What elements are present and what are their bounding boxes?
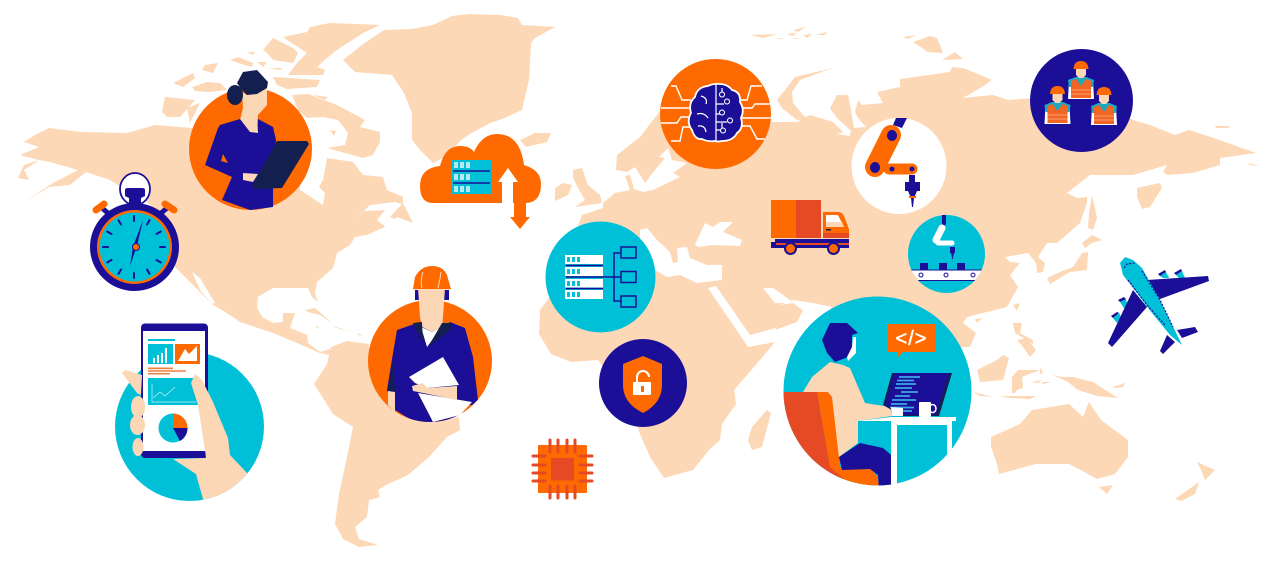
land: New Zealand	[1175, 462, 1215, 501]
belt edges	[905, 270, 989, 280]
land: Iceland	[520, 133, 551, 147]
land: Tasmania	[1099, 485, 1113, 494]
land: Novaya Zemlya	[777, 67, 837, 120]
keyhole	[641, 386, 644, 392]
cab	[823, 212, 849, 238]
land: Hokkaido	[1082, 235, 1102, 248]
left engine two cap	[1111, 312, 1119, 318]
desk leg left	[891, 421, 897, 487]
orange bezel	[97, 210, 172, 284]
sea: Red Sea and Gulf of Aden	[708, 286, 776, 347]
ring handle	[120, 173, 150, 205]
teal disc	[546, 222, 656, 332]
needle	[130, 220, 143, 266]
jacket body	[387, 322, 478, 424]
icon: delivery truck	[771, 200, 849, 254]
bars	[153, 348, 167, 363]
window lines	[1124, 263, 1173, 327]
land: Arctic Russia islands	[750, 27, 1260, 166]
dial ticks	[103, 216, 165, 278]
circuit traces	[661, 86, 771, 141]
right wing engine two	[1176, 271, 1185, 278]
download arrow	[510, 182, 530, 229]
screen	[143, 331, 205, 451]
pie orange slice	[173, 414, 188, 428]
land: North America	[18, 120, 413, 355]
helmet	[1074, 61, 1088, 69]
right engine two cap	[1174, 269, 1182, 275]
server stack	[452, 160, 492, 194]
ring finger	[130, 415, 145, 435]
hair	[415, 288, 449, 300]
navy disc	[1030, 49, 1133, 152]
white disc	[852, 118, 946, 214]
tail left	[1160, 335, 1175, 354]
chassis stripe	[776, 243, 849, 245]
land: Baffin island	[292, 94, 380, 158]
icon: developer at desk	[780, 296, 972, 490]
arm mount	[893, 118, 907, 128]
crown	[125, 188, 145, 205]
collar	[1044, 102, 1070, 112]
vest	[1094, 105, 1114, 124]
land: Kamchatka	[1137, 183, 1162, 209]
conveyor belt	[905, 270, 989, 280]
tail right	[1177, 327, 1198, 338]
cargo box right	[796, 200, 821, 238]
window	[826, 215, 844, 227]
joints	[870, 130, 915, 173]
belt surface	[912, 270, 982, 280]
inland seas	[192, 202, 832, 347]
land: New Guinea	[1053, 375, 1137, 398]
sea: Mediterranean	[640, 228, 722, 283]
right wing	[1147, 276, 1209, 299]
clipboard	[409, 357, 459, 388]
middle finger	[131, 396, 145, 418]
hair	[237, 70, 268, 95]
door handle	[826, 229, 831, 230]
left wing engine one	[1120, 299, 1128, 308]
line chart tile	[148, 378, 199, 405]
mug handle	[929, 404, 936, 412]
left arm	[388, 391, 395, 412]
line chart	[152, 384, 196, 402]
brain midline and circuits	[697, 84, 727, 141]
pie base	[158, 414, 188, 442]
pie navy slice	[173, 428, 188, 441]
icon: shield lock	[599, 339, 687, 427]
left stem	[102, 208, 109, 214]
orange chair edge	[817, 392, 879, 490]
area chart tile	[175, 344, 200, 364]
body	[1091, 103, 1117, 125]
circuit nodes	[720, 92, 733, 133]
worker left	[1044, 86, 1070, 124]
wrist	[909, 175, 915, 182]
forearm	[889, 164, 912, 174]
drill band	[909, 196, 916, 198]
helmet	[1096, 87, 1112, 95]
collar	[1068, 77, 1094, 87]
land: Southeast Asian islands	[973, 303, 1052, 400]
chassis	[771, 239, 849, 248]
land: South America	[314, 341, 460, 547]
connector lines	[566, 253, 621, 301]
white shirt	[422, 328, 439, 347]
hand	[891, 407, 903, 416]
orange disc	[660, 59, 771, 169]
sea: Black Sea	[695, 222, 742, 247]
hair	[822, 323, 858, 362]
clipped scene	[780, 362, 956, 490]
teal disc	[115, 352, 264, 501]
bubble body	[888, 324, 936, 357]
case	[90, 203, 179, 291]
boxes	[920, 263, 965, 270]
shoulder shade	[388, 360, 395, 392]
teal disc	[908, 215, 985, 293]
red chair back	[784, 392, 848, 481]
body	[1068, 77, 1094, 99]
mug	[919, 402, 931, 417]
chip core	[551, 458, 574, 480]
left engine one cap	[1118, 297, 1126, 302]
land: Honshu	[1047, 252, 1088, 284]
arm gripper	[950, 247, 955, 260]
icon: cloud server	[420, 134, 541, 229]
worker top	[1068, 61, 1094, 99]
index finger	[122, 370, 142, 395]
face	[1076, 69, 1086, 78]
hand	[173, 374, 248, 500]
lower paper	[418, 393, 472, 422]
white arm lower	[938, 240, 952, 246]
gripper head	[905, 182, 920, 191]
land: Sakhalin	[1088, 195, 1097, 230]
vest stripes	[1094, 116, 1114, 120]
little finger	[132, 438, 144, 456]
right engine one cap	[1158, 270, 1166, 276]
vest stripes	[1071, 90, 1091, 94]
padlock body	[633, 382, 651, 395]
navy dress	[205, 119, 276, 210]
text lines	[148, 368, 186, 374]
right pusher	[165, 204, 174, 210]
code glyph: </>	[896, 328, 927, 350]
right stem	[160, 208, 167, 214]
code bubble	[888, 324, 936, 357]
window shade	[826, 222, 844, 227]
land: Caribbean islands	[305, 308, 363, 336]
teal face	[100, 212, 170, 282]
torso and arm	[803, 362, 892, 457]
screen panel	[885, 373, 949, 415]
hard hat	[413, 266, 451, 289]
phone case	[141, 324, 208, 458]
land: Britain	[573, 168, 602, 207]
upper arm	[875, 135, 891, 167]
icon: conveyor robot	[905, 215, 989, 293]
cloud shape	[420, 134, 541, 203]
rollers	[919, 273, 975, 277]
face	[1099, 95, 1109, 104]
icon: robot arm	[852, 118, 946, 214]
code lines	[890, 377, 920, 411]
icon: brain	[660, 59, 771, 169]
body	[1044, 102, 1070, 124]
orange disc	[189, 88, 312, 210]
cab lower panel	[823, 233, 849, 238]
laptop screen	[883, 373, 952, 416]
pivot	[132, 244, 140, 250]
face and neck	[240, 88, 267, 133]
legs	[839, 443, 893, 486]
server lights	[454, 162, 470, 192]
vest	[1071, 79, 1091, 98]
left wing engine two	[1113, 313, 1121, 323]
icon: server network	[546, 222, 656, 332]
orange shield	[623, 356, 662, 413]
cargo box left	[771, 200, 796, 238]
icon: microchip	[533, 440, 592, 498]
land: Ireland	[555, 183, 572, 201]
tablet	[252, 141, 309, 189]
chip body	[538, 445, 587, 493]
navy jacket	[387, 322, 478, 424]
hand	[243, 173, 258, 182]
padlock shackle	[637, 371, 649, 382]
ear and face edge	[847, 337, 856, 361]
icon: airplane	[1108, 257, 1209, 354]
rear wheel	[785, 243, 796, 254]
icon: stopwatch	[90, 173, 179, 291]
palm and thumb	[173, 374, 248, 500]
face and neck	[418, 288, 445, 332]
orange disc	[368, 300, 492, 422]
server dividers	[453, 171, 490, 183]
desk underside	[897, 421, 952, 425]
chip pins	[533, 440, 592, 498]
desk leg right	[947, 425, 952, 454]
left pusher	[96, 204, 104, 210]
vest	[1048, 104, 1068, 123]
sea: Gulf of California	[192, 272, 215, 304]
bar chart tile	[148, 344, 173, 364]
screen heading	[148, 339, 175, 341]
teal disc	[784, 296, 972, 486]
land: Greenland	[343, 14, 555, 163]
desk top	[858, 417, 956, 421]
icon: workers team	[1030, 49, 1133, 152]
land: Madagascar	[748, 410, 771, 450]
brain outline	[689, 84, 743, 142]
vest stripes	[1048, 115, 1068, 119]
face	[1052, 94, 1062, 103]
node boxes	[621, 247, 636, 307]
upload arrow	[498, 168, 518, 204]
forearm	[412, 383, 457, 400]
dark lapels	[413, 322, 452, 347]
server rows	[565, 255, 603, 299]
land: Ellesmere island	[283, 23, 380, 75]
worker right	[1091, 87, 1117, 125]
icon: engineer	[368, 266, 492, 424]
navy disc	[599, 339, 687, 427]
hair bun	[227, 85, 243, 105]
drill	[908, 191, 917, 207]
front wheel	[828, 243, 839, 254]
left wing	[1108, 290, 1147, 347]
area chart	[178, 346, 197, 361]
icon: woman with tablet	[189, 70, 312, 210]
sea: St Lawrence	[352, 202, 402, 236]
sea: Gulf of Oman	[780, 300, 832, 325]
icon: hand with phone	[115, 324, 264, 510]
land: Arctic islands	[162, 38, 336, 136]
land: Eurasia and Africa	[539, 67, 1256, 478]
server lights	[567, 257, 580, 297]
arm mount	[942, 215, 946, 226]
collar	[1091, 103, 1117, 113]
hat ridges	[413, 272, 451, 290]
helmet	[1050, 86, 1065, 94]
white arm upper	[936, 228, 942, 240]
right wing engine one	[1160, 272, 1169, 278]
fuselage	[1120, 257, 1182, 345]
land: Australia	[991, 402, 1128, 479]
elbow gap	[221, 154, 228, 163]
sea: Persian Gulf	[763, 288, 793, 303]
